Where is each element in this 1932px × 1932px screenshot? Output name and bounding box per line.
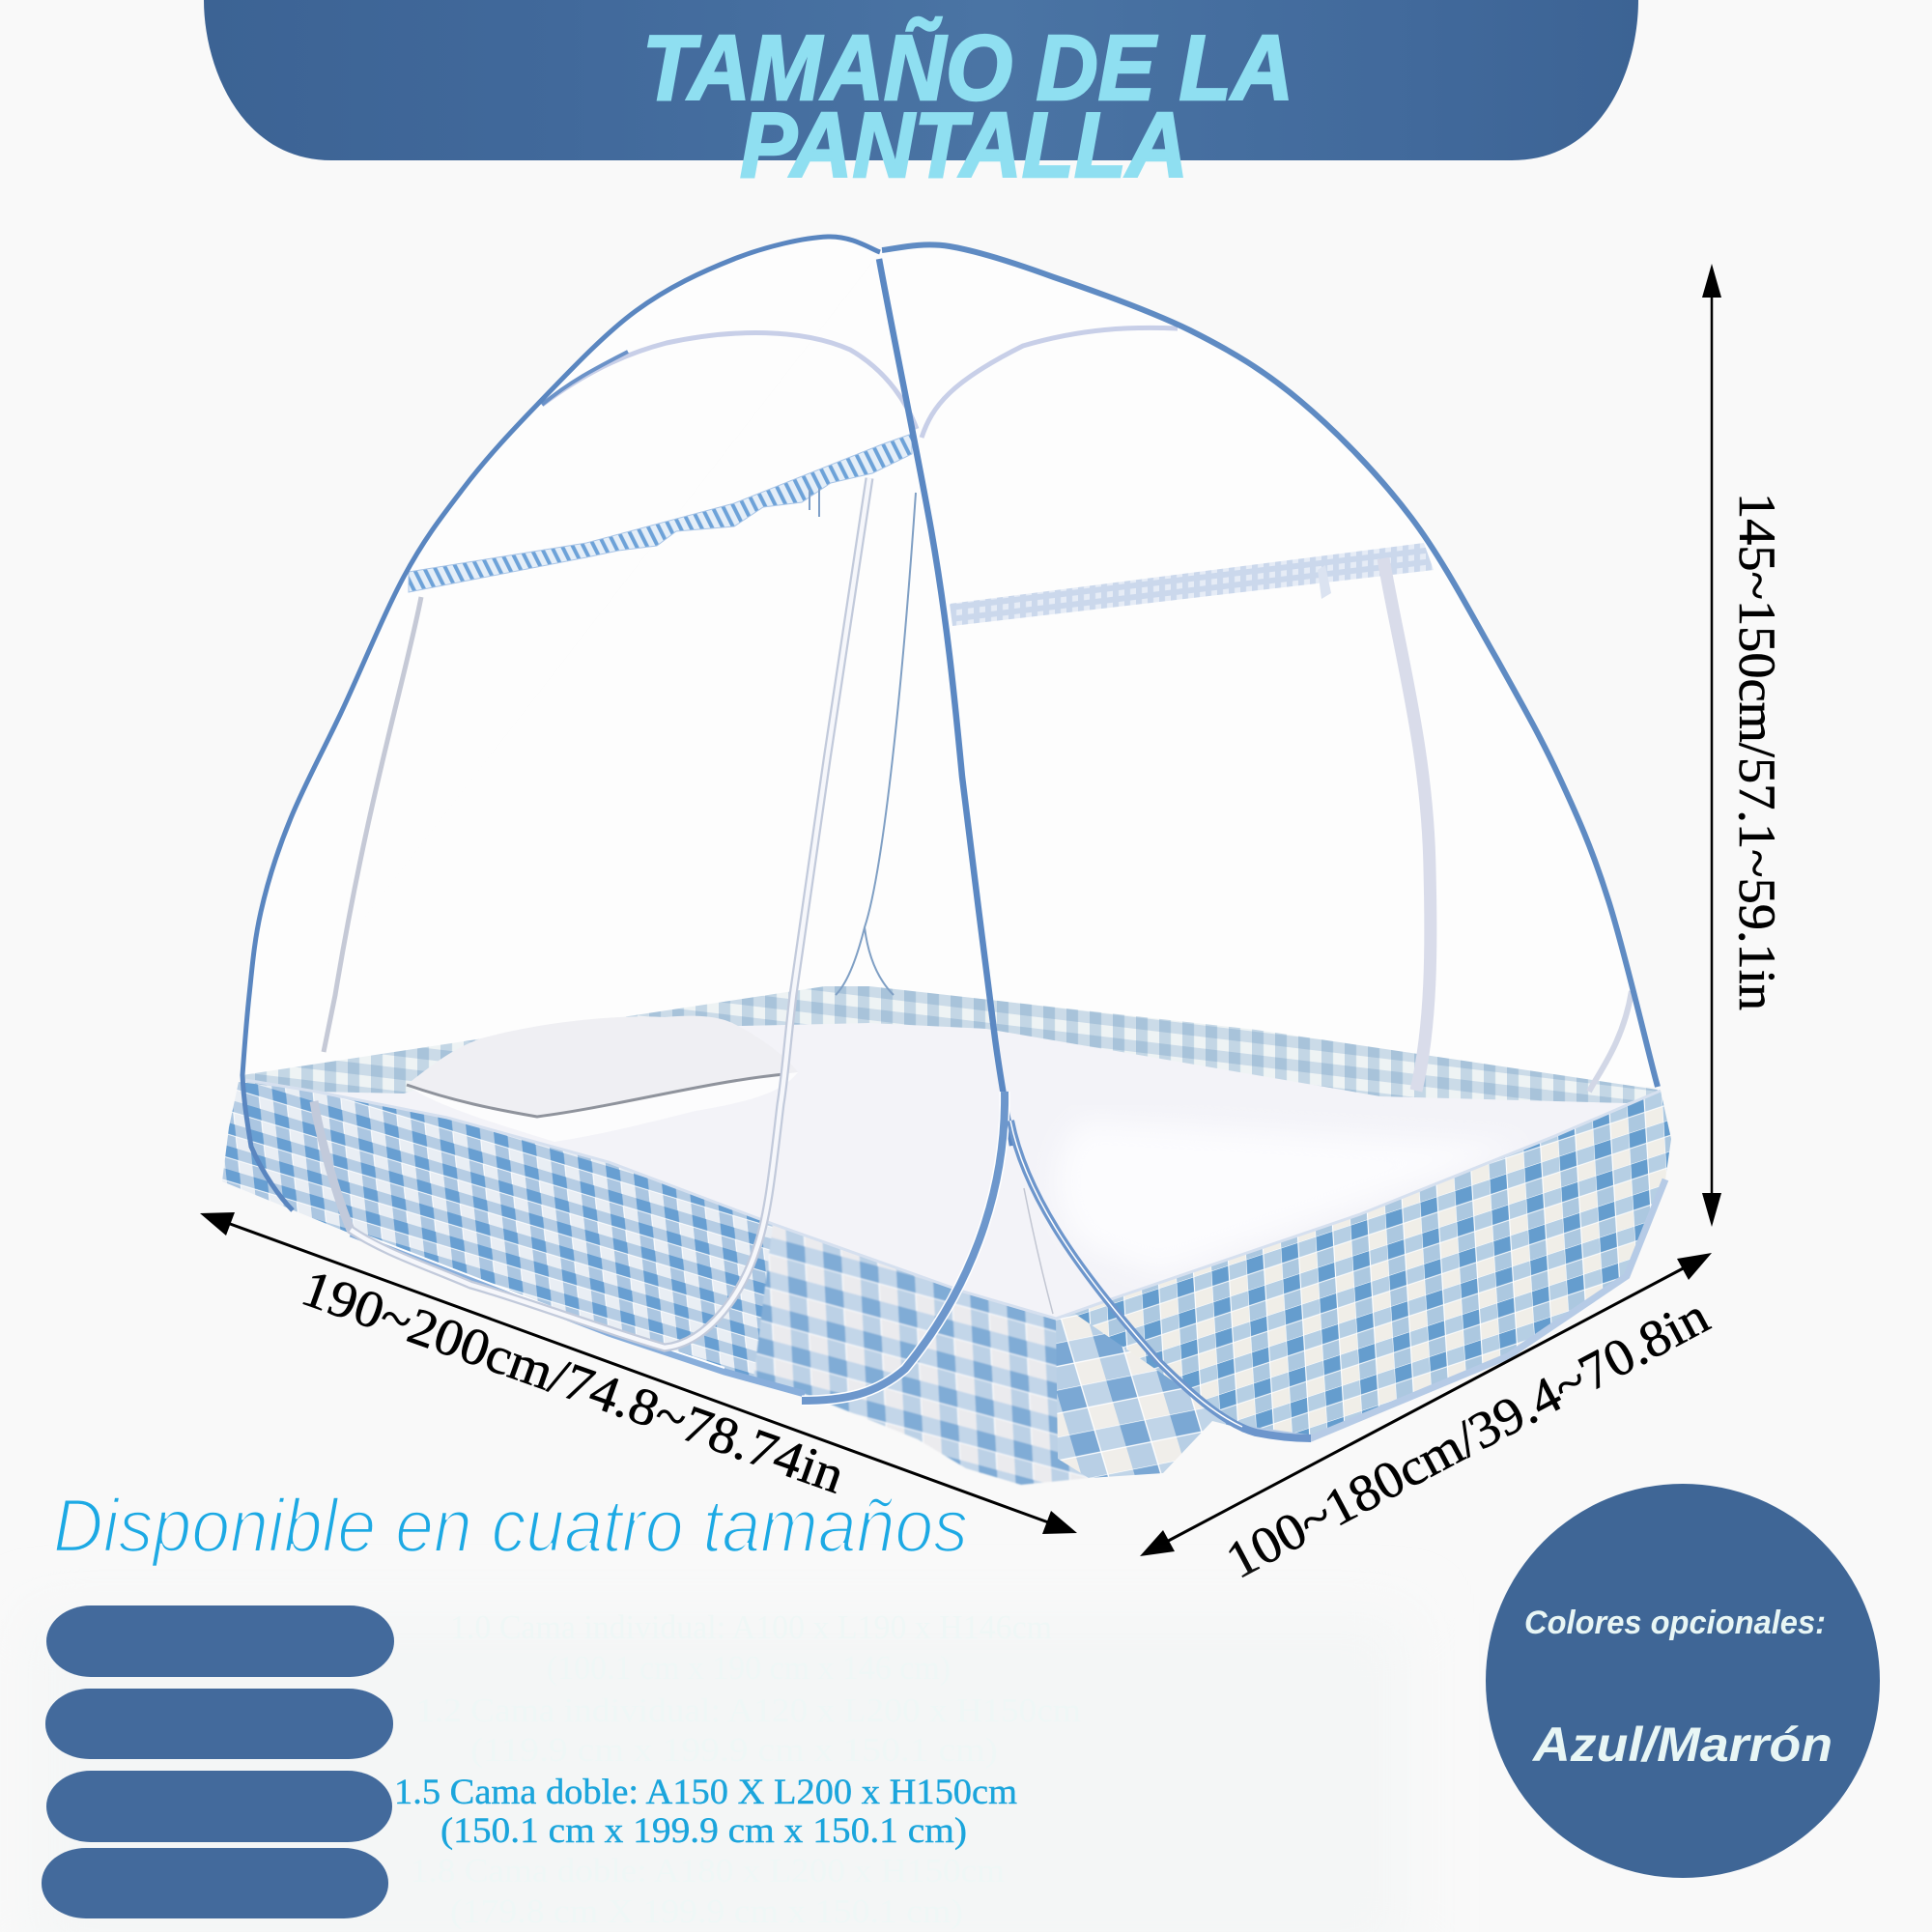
left pale hoop	[542, 333, 917, 429]
front blue pole	[879, 259, 1012, 1146]
faint size text: 1.0 bed	[450, 1608, 1052, 1687]
left gingham skirt	[222, 1082, 805, 1394]
length label: 190~200cm/74.8~78.74in	[295, 1259, 852, 1505]
right valance	[950, 543, 1434, 626]
faint size text: 1.8 bed: (179.8 cm X 199.9 cm x 150.1 cm)	[450, 1892, 963, 1930]
skirt piping	[245, 1080, 1661, 1319]
length dimension arrow	[200, 1212, 1077, 1534]
thin centre line	[1024, 1188, 1053, 1314]
mosquito net tent illustration	[222, 237, 1671, 1485]
back gingham border	[242, 986, 1658, 1140]
faint size text: 1.8 bed: 1.8 Cama doble: A180 x L200 x H150cm	[411, 1852, 1005, 1889]
valance loop	[810, 489, 819, 517]
faint size text: 1.0 bed: 1.0 Cama individual: A100 x L190 x H146cm	[450, 1608, 1052, 1646]
faint size text: 1.2 bed: (119.9 cm x 199.9 cm x 150.1 cm)	[470, 1731, 998, 1769]
thin inner door line	[836, 493, 916, 995]
right corner strap	[1589, 991, 1632, 1092]
centre gingham skirt	[753, 1224, 1089, 1485]
sizes background panel	[29, 1613, 1410, 1932]
badge caption: Colores opcionales:	[1524, 1605, 1826, 1641]
size pills	[42, 1605, 394, 1918]
pillow	[407, 1016, 798, 1142]
available sizes heading: Disponible en cuatro tamaños	[53, 1483, 968, 1568]
right valance tie	[1318, 565, 1331, 599]
left hoop blue join	[542, 352, 628, 405]
title: TAMAÑO DE LA	[642, 16, 1293, 120]
net interior	[242, 237, 1658, 1087]
right skirt hem	[1242, 1179, 1665, 1438]
front left white door pole	[314, 478, 869, 1348]
height label: 145~150cm/57.1~59.1in	[1728, 493, 1786, 1010]
badge colours: Azul/Marrón	[1531, 1718, 1833, 1772]
front right arm	[1010, 1121, 1311, 1438]
left skirt hem	[351, 1234, 805, 1394]
mattress	[316, 1023, 1661, 1318]
right inner strap	[1383, 558, 1431, 1091]
faint size text: 1.2 bed: 1.2 Cama individual: A120 x L200 x H150cm	[416, 1691, 1081, 1729]
faint size text: 1.0 bed: (100.1 cm x 190 cm x 146 cm)	[547, 1649, 951, 1687]
mattress highlight	[1057, 1121, 1526, 1275]
width label: 100~180cm/39.4~70.8in	[1216, 1287, 1719, 1590]
pillow seam	[407, 1074, 784, 1117]
faint size text: 1.8 bed	[411, 1852, 1005, 1930]
size text: 1.5 bed	[394, 1773, 1017, 1851]
left outer blue pole	[242, 237, 880, 1210]
left inner post	[324, 597, 421, 1052]
faint size text: 1.2 bed	[416, 1691, 1081, 1769]
colour options badge	[1486, 1484, 1880, 1878]
pillow lower face	[407, 1072, 798, 1142]
header banner	[204, 0, 1638, 160]
left gathered valance	[409, 434, 912, 592]
size text: 1.5 bed: (150.1 cm x 199.9 cm x 150.1 cm)	[440, 1811, 967, 1851]
size text: 1.5 bed: 1.5 Cama doble: A150 X L200 x H150cm	[394, 1773, 1017, 1812]
height dimension arrow	[1702, 264, 1721, 1227]
title: PANTALLA	[740, 94, 1188, 197]
right pale hoop	[922, 327, 1178, 438]
right gingham skirt	[1072, 1091, 1671, 1438]
width dimension arrow	[1140, 1253, 1712, 1556]
right outer blue pole	[882, 244, 1658, 1087]
corner gingham skirt	[1056, 1302, 1242, 1478]
title	[642, 16, 1293, 197]
front left arm	[802, 1092, 1005, 1401]
